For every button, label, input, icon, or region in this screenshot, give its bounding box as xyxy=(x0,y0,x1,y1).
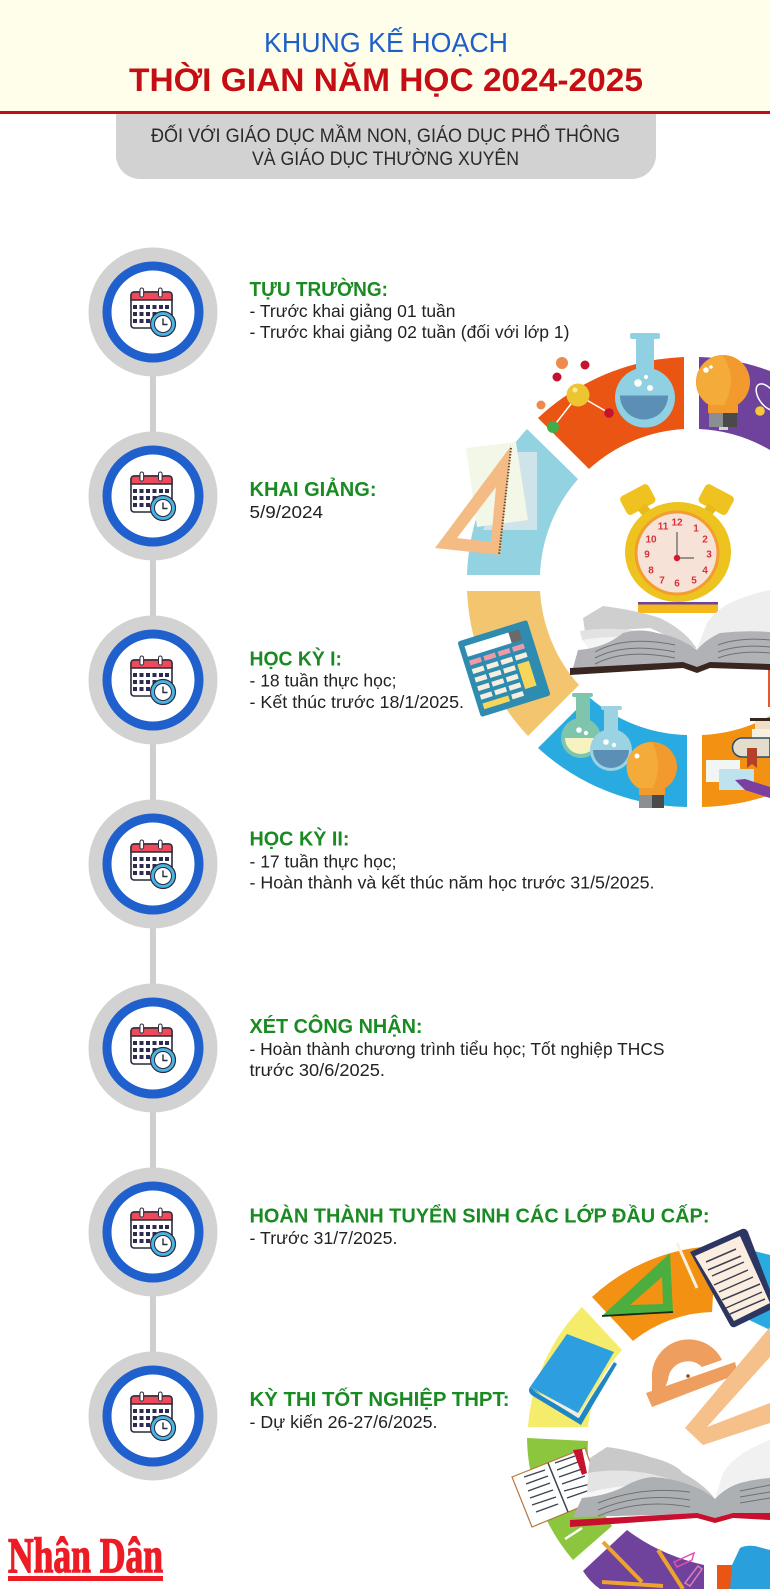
subtitle text: VÀ GIÁO DỤC THƯỜNG XUYÊN xyxy=(252,147,519,170)
icon: alarm clock: 6 xyxy=(674,578,680,590)
step text xyxy=(250,1204,710,1248)
ring segments xyxy=(467,357,770,807)
icon: books and pencil xyxy=(706,718,770,798)
icon: set square and papers xyxy=(435,442,537,555)
step text: TỰU TRƯỜNG: xyxy=(250,277,388,301)
icon: alarm clock: 3 xyxy=(706,550,712,560)
icon: alarm clock: 9 xyxy=(644,550,650,560)
step text: 5/9/2024 xyxy=(250,502,323,522)
step text xyxy=(250,1387,510,1432)
title line 2: THỜI GIAN NĂM HỌC 2024-2025 xyxy=(129,62,643,98)
step: xét công nhận xyxy=(88,984,664,1112)
step text: - Trước 31/7/2025. xyxy=(250,1228,398,1248)
step text xyxy=(250,1014,664,1080)
step text: - 18 tuần thực học; xyxy=(250,671,396,691)
logo: Nhân Dân: Nhân Dân xyxy=(8,1527,163,1583)
step: hoàn thành tuyển sinh xyxy=(88,1168,710,1296)
icon: lower bulb xyxy=(627,742,677,808)
icon: alarm clock: 5 xyxy=(691,576,697,586)
step text: KHAI GIẢNG: xyxy=(250,478,376,501)
step icon xyxy=(88,248,218,376)
icon: alarm clock: 1 xyxy=(693,524,699,534)
icon: tablet xyxy=(690,1229,770,1327)
step icon xyxy=(88,800,218,928)
step text xyxy=(250,647,464,712)
icon: flask xyxy=(615,333,675,428)
step text: - Hoàn thành chương trình tiểu học; Tốt nghiệp THCS xyxy=(250,1039,664,1059)
step: học kỳ II xyxy=(88,800,654,928)
icon: large open book xyxy=(570,1440,770,1527)
step icon xyxy=(88,984,218,1112)
subtitle text xyxy=(151,123,620,170)
icon: protractor xyxy=(646,1339,738,1407)
icon: calculator xyxy=(457,620,551,717)
step text xyxy=(250,827,654,892)
icon: alarm clock: 4 xyxy=(702,566,708,576)
title line 1: KHUNG KẾ HOẠCH xyxy=(264,27,508,58)
icon: small open book xyxy=(512,1448,600,1527)
icon: alarm clock: 12 xyxy=(671,518,683,528)
icon: alarm clock: 7 xyxy=(659,576,665,586)
icon: blue book xyxy=(529,1334,617,1425)
icon: light bulb xyxy=(696,355,750,430)
step text: KỲ THI TỐT NGHIỆP THPT: xyxy=(250,1387,510,1411)
timeline connector xyxy=(150,312,156,1416)
step: kỳ thi tốt nghiệp xyxy=(88,1352,510,1480)
illustration: school supplies xyxy=(512,1229,770,1589)
header band xyxy=(0,0,770,112)
icon: open book xyxy=(570,590,770,675)
step icon xyxy=(88,616,218,744)
step text: - Trước khai giảng 01 tuần xyxy=(250,301,456,321)
step: tựu trường xyxy=(88,248,570,376)
icon: pencils and clip xyxy=(602,1542,702,1589)
icon: pencil xyxy=(677,1243,697,1288)
step text: - Kết thúc trước 18/1/2025. xyxy=(250,692,464,712)
header rule xyxy=(0,111,770,114)
step text xyxy=(250,277,570,342)
step text: - 17 tuần thực học; xyxy=(250,852,396,872)
icon: alarm clock: 11 xyxy=(658,522,669,532)
icon: triangle ruler xyxy=(685,1327,770,1445)
step icon xyxy=(88,1168,218,1296)
icon: flasks xyxy=(561,693,632,771)
step text: - Hoàn thành và kết thúc năm học trước 31/5/2025. xyxy=(250,872,654,892)
icon: blue bag xyxy=(730,1546,770,1589)
step: khai giảng xyxy=(88,432,376,560)
icon: green set square xyxy=(602,1253,673,1316)
icon: alarm clock xyxy=(619,483,735,613)
illustration: education ring xyxy=(435,333,770,808)
icon: alarm clock: 2 xyxy=(702,534,708,546)
step text: XÉT CÔNG NHẬN: xyxy=(250,1014,422,1038)
step: học kỳ I xyxy=(88,616,464,744)
icon: molecule xyxy=(536,357,614,433)
step text: trước 30/6/2025. xyxy=(250,1060,385,1080)
step text: HỌC KỲ I: xyxy=(250,647,342,671)
step text: HỌC KỲ II: xyxy=(250,827,350,851)
step text xyxy=(250,478,376,522)
icon: orbit xyxy=(752,380,770,416)
subtitle pill xyxy=(116,112,656,179)
step icon xyxy=(88,432,218,560)
step text: HOÀN THÀNH TUYỂN SINH CÁC LỚP ĐẦU CẤP: xyxy=(250,1204,710,1228)
step text: - Dự kiến 26-27/6/2025. xyxy=(250,1412,438,1432)
subtitle text: ĐỐI VỚI GIÁO DỤC MẦM NON, GIÁO DỤC PHỔ THÔNG xyxy=(151,123,620,147)
step icon xyxy=(88,1352,218,1480)
step text: - Trước khai giảng 02 tuần (đối với lớp 1) xyxy=(250,322,570,342)
icon: alarm clock: 8 xyxy=(648,566,654,576)
ring segments xyxy=(527,1246,770,1589)
icon: alarm clock: 10 xyxy=(645,534,657,546)
